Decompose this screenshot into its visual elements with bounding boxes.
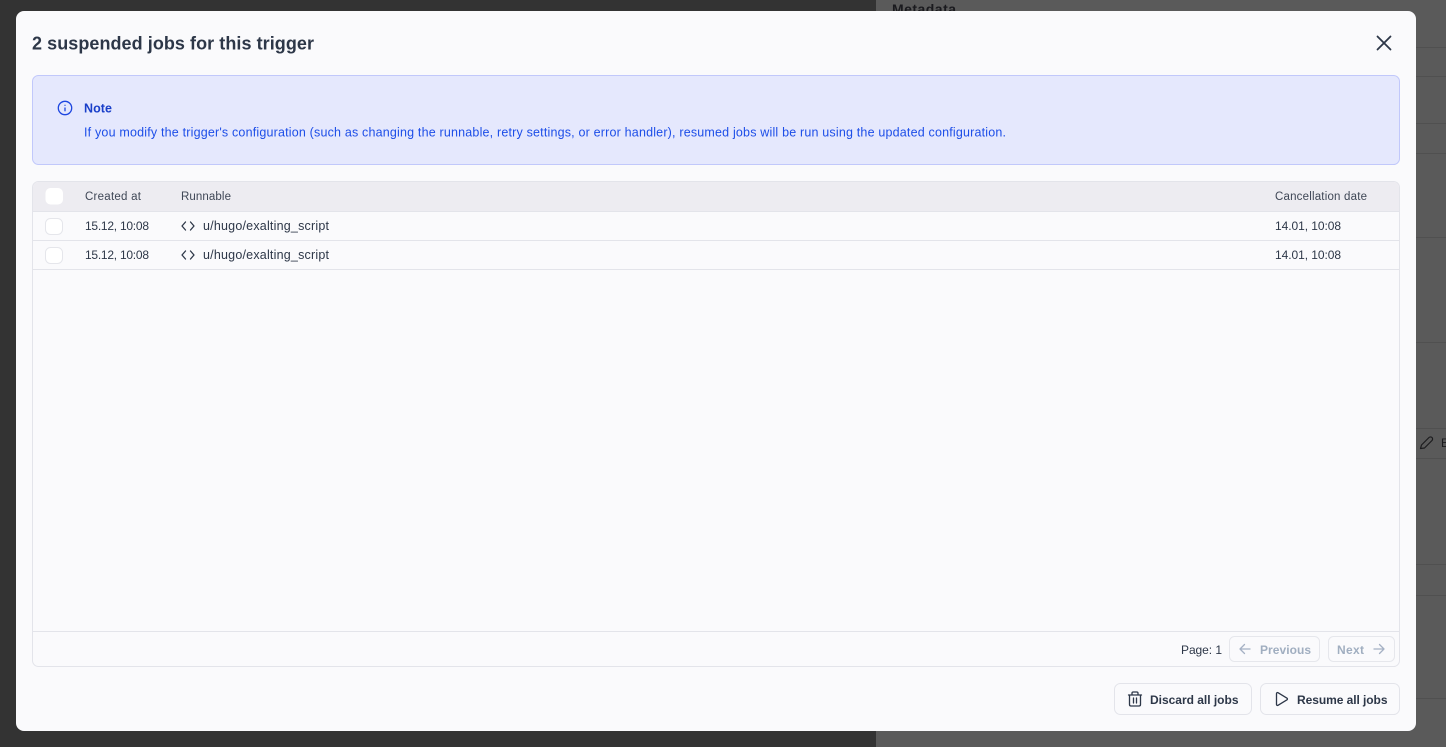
table header xyxy=(33,182,1399,211)
table row 1: u/hugo/exalting_script xyxy=(203,219,330,233)
button: discard all jobs: Discard all jobs xyxy=(1150,693,1239,707)
icon: background pencil xyxy=(1420,437,1433,448)
panel: note xyxy=(32,76,1400,164)
panel: jobs table xyxy=(32,182,1400,666)
button: resume all jobs xyxy=(1260,684,1400,714)
table row 2 xyxy=(46,248,1341,264)
button: previous: Previous xyxy=(1260,643,1311,657)
icon: trash xyxy=(1128,692,1142,706)
background heading: Metadata: Metadata xyxy=(892,1,956,17)
note text: If you modify the trigger's configuration (such as changing the runnable, retry settings, or error handler), resumed jobs will be run using the updated configuration. xyxy=(84,126,1006,140)
header: runnable: Runnable xyxy=(181,191,231,203)
title: 2 suspended jobs for this trigger xyxy=(32,34,314,54)
table row 2: 14.01, 10:08 xyxy=(1275,248,1341,262)
icon: info xyxy=(58,101,72,115)
header checkbox xyxy=(46,188,63,204)
header: cancellation date: Cancellation date xyxy=(1275,191,1367,203)
button: next xyxy=(1328,636,1394,662)
icon: close xyxy=(1378,36,1390,50)
table row 1 xyxy=(46,218,1341,234)
icon: code xyxy=(182,222,194,230)
table row 1: 14.01, 10:08 xyxy=(1275,219,1341,233)
table row 1: 15.12, 10:08 xyxy=(85,219,149,233)
icon: play xyxy=(1276,693,1287,705)
pagination xyxy=(1181,636,1394,662)
note heading: Note xyxy=(84,102,112,116)
table row 2: u/hugo/exalting_script xyxy=(203,248,330,262)
button: resume all jobs: Resume all jobs xyxy=(1297,693,1388,707)
icon: code xyxy=(182,251,194,259)
header: created at: Created at xyxy=(85,191,142,203)
button: previous xyxy=(1230,636,1320,662)
button: next: Next xyxy=(1337,643,1364,657)
table row 2: 15.12, 10:08 xyxy=(85,248,149,262)
button: discard all jobs xyxy=(1114,684,1252,714)
page label: Page: 1 xyxy=(1181,643,1222,657)
